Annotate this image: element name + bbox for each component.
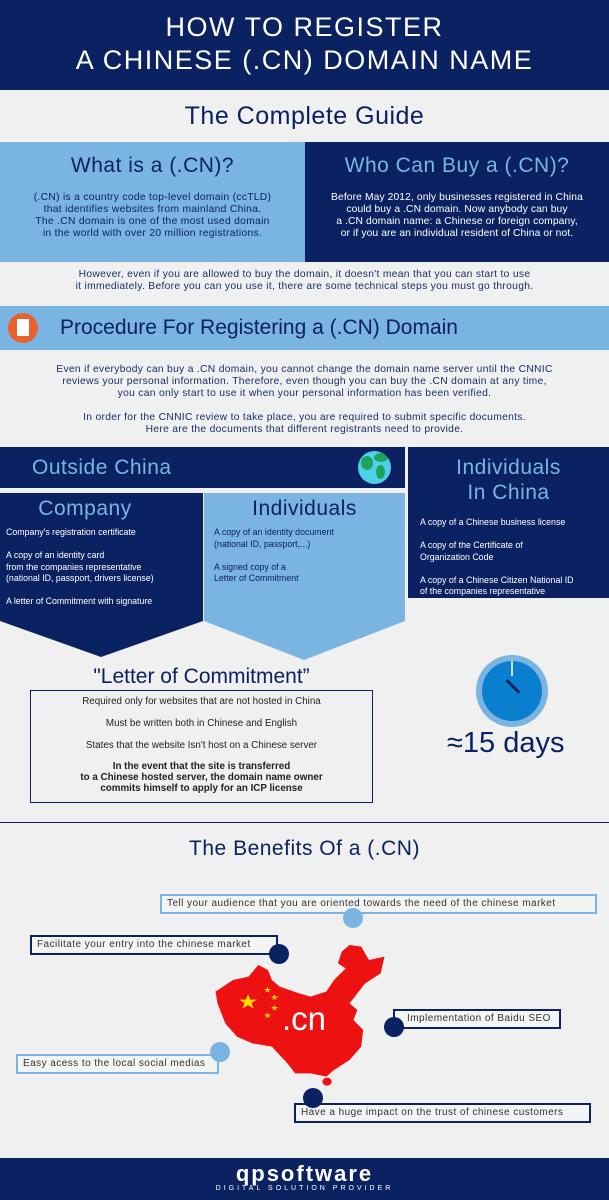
icon: globe — [358, 451, 391, 484]
text: 15 days: ≈15 days — [447, 727, 564, 759]
callout: audience: Tell your audience that you are oriented towards the need of the chinese market — [167, 898, 556, 909]
callout: baidu — [393, 1009, 561, 1029]
footer — [0, 1158, 609, 1200]
map: china: ★ — [263, 986, 272, 995]
list: company: A letter of Commitment with signature — [6, 596, 152, 606]
list: company — [6, 527, 154, 606]
callout: entry — [30, 935, 278, 955]
text: procedure: Even if everybody can buy a .CN domain, you cannot change the domain name server until the CNNIC — [56, 364, 553, 375]
callout: entry: Facilitate your entry into the chinese market — [37, 939, 251, 950]
text: who can buy — [331, 192, 583, 239]
box: letter details: Must be written both in Chinese and English — [106, 718, 297, 729]
box: letter details: commits himself to apply for an ICP license — [100, 783, 303, 794]
map: china: ★ — [270, 1004, 279, 1013]
panel: what is — [0, 142, 305, 262]
text: what is: (.CN) is a country code top-level domain (ccTLD) — [34, 192, 271, 203]
heading: who can buy: Who Can Buy a (.CN)? — [345, 154, 569, 177]
list: individuals: A copy of an identity document — [214, 527, 334, 537]
heading: letter of commitment: "Letter of Commitment” — [93, 665, 310, 688]
list: in china — [420, 517, 574, 596]
footer: DIGITAL SOLUTION PROVIDER — [216, 1185, 393, 1192]
map: china: ★ — [270, 994, 279, 1003]
logo: qpsoftware — [236, 1161, 373, 1186]
text: what is: The .CN domain is one of the most used domain — [35, 216, 270, 227]
text: what is: that identifies websites from mainland China. — [44, 204, 261, 215]
text: .cn: .cn — [282, 1000, 326, 1037]
box: letter details: Required only for websites that are not hosted in China — [82, 696, 321, 707]
icon: timer — [476, 655, 548, 727]
text: procedure — [56, 364, 553, 435]
icon: document — [8, 313, 38, 343]
list: in china: A copy of the Certificate of — [420, 540, 523, 550]
text: who can buy: could buy a .CN domain. Now anybody can buy — [346, 204, 568, 215]
callout: trust: Have a huge impact on the trust of chinese customers — [301, 1107, 563, 1118]
map: china — [216, 945, 384, 1086]
panel: individuals in china — [408, 447, 609, 598]
list: company: (national ID, passport, drivers license) — [6, 573, 154, 583]
text: however — [76, 269, 533, 292]
list: in china: A copy of a Chinese Citizen National ID — [420, 574, 574, 584]
text: what is: in the world with over 20 million registrations. — [43, 228, 262, 239]
list: in china: A copy of a Chinese business license — [420, 517, 565, 527]
subtitle: The Complete Guide — [185, 102, 424, 130]
list: company: from the companies representative — [6, 562, 141, 572]
heading: individuals in china — [456, 456, 561, 504]
list: in china: Organization Code — [420, 552, 493, 562]
map: china: ★ — [263, 1012, 272, 1021]
text: procedure: reviews your personal information. Therefore, even though you can buy the .CN domain at any time, — [62, 376, 547, 387]
heading: individuals in china: In China — [467, 481, 550, 504]
heading: benefits: The Benefits Of a (.CN) — [189, 837, 420, 860]
heading: individuals: Individuals — [252, 497, 357, 520]
list: company: A copy of an identity card — [6, 550, 104, 560]
heading: outside china: Outside China — [32, 456, 172, 479]
dot — [343, 908, 363, 928]
box: letter details — [30, 690, 373, 803]
header: A CHINESE (.CN) DOMAIN NAME — [76, 45, 533, 75]
box: letter details: to a Chinese hosted server, the domain name owner — [80, 772, 323, 783]
text: what is — [34, 192, 271, 239]
outside china bar — [0, 447, 405, 488]
list: individuals: A signed copy of a — [214, 562, 286, 572]
text: who can buy: Before May 2012, only businesses registered in China — [331, 192, 583, 203]
callout: audience — [160, 894, 597, 914]
heading: procedure: Procedure For Registering a (.CN) Domain — [60, 316, 458, 339]
heading: individuals in china: Individuals — [456, 456, 561, 479]
list: in china: of the companies representative — [420, 586, 545, 596]
text: however: However, even if you are allowed to buy the domain, it doesn't mean that you can start to use — [79, 269, 530, 280]
map: china: ★ — [238, 991, 259, 1014]
text: who can buy: or if you are an individual resident of China or not. — [341, 228, 573, 239]
box: letter details: In the event that the site is transferred — [113, 761, 290, 772]
text: procedure: Here are the documents that different registrants need to provide. — [146, 424, 463, 435]
text: procedure: In order for the CNNIC review to take place, you are required to submit specific documents. — [83, 412, 526, 423]
panel: individuals — [204, 493, 405, 660]
heading: what is: What is a (.CN)? — [71, 154, 234, 177]
panel: who can buy — [305, 142, 609, 262]
text: who can buy: a .CN domain name: a Chinese or foreign company, — [336, 216, 578, 227]
box: letter details: States that the website Isn't host on a Chinese server — [86, 740, 317, 751]
list: individuals — [214, 527, 334, 583]
panel: company — [0, 493, 203, 657]
text: however: it immediately. Before you can you use it, there are some technical steps you must go through. — [76, 281, 533, 292]
header: HOW TO REGISTER — [165, 12, 444, 42]
callout: social — [16, 1054, 219, 1074]
callout: baidu: Implementation of Baidu SEO — [407, 1013, 551, 1024]
callout: social: Easy acess to the local social medias — [23, 1058, 205, 1069]
list: company: Company's registration certificate — [6, 527, 136, 537]
header — [0, 0, 609, 90]
text: procedure: you can only start to use it when your personal information has been verified. — [118, 388, 491, 399]
list: individuals: (national ID, passport,...) — [214, 538, 310, 548]
callout: trust — [294, 1103, 591, 1123]
procedure bar — [0, 306, 609, 350]
list: individuals: Letter of Commitment — [214, 573, 299, 583]
heading: company: Company — [38, 497, 132, 520]
